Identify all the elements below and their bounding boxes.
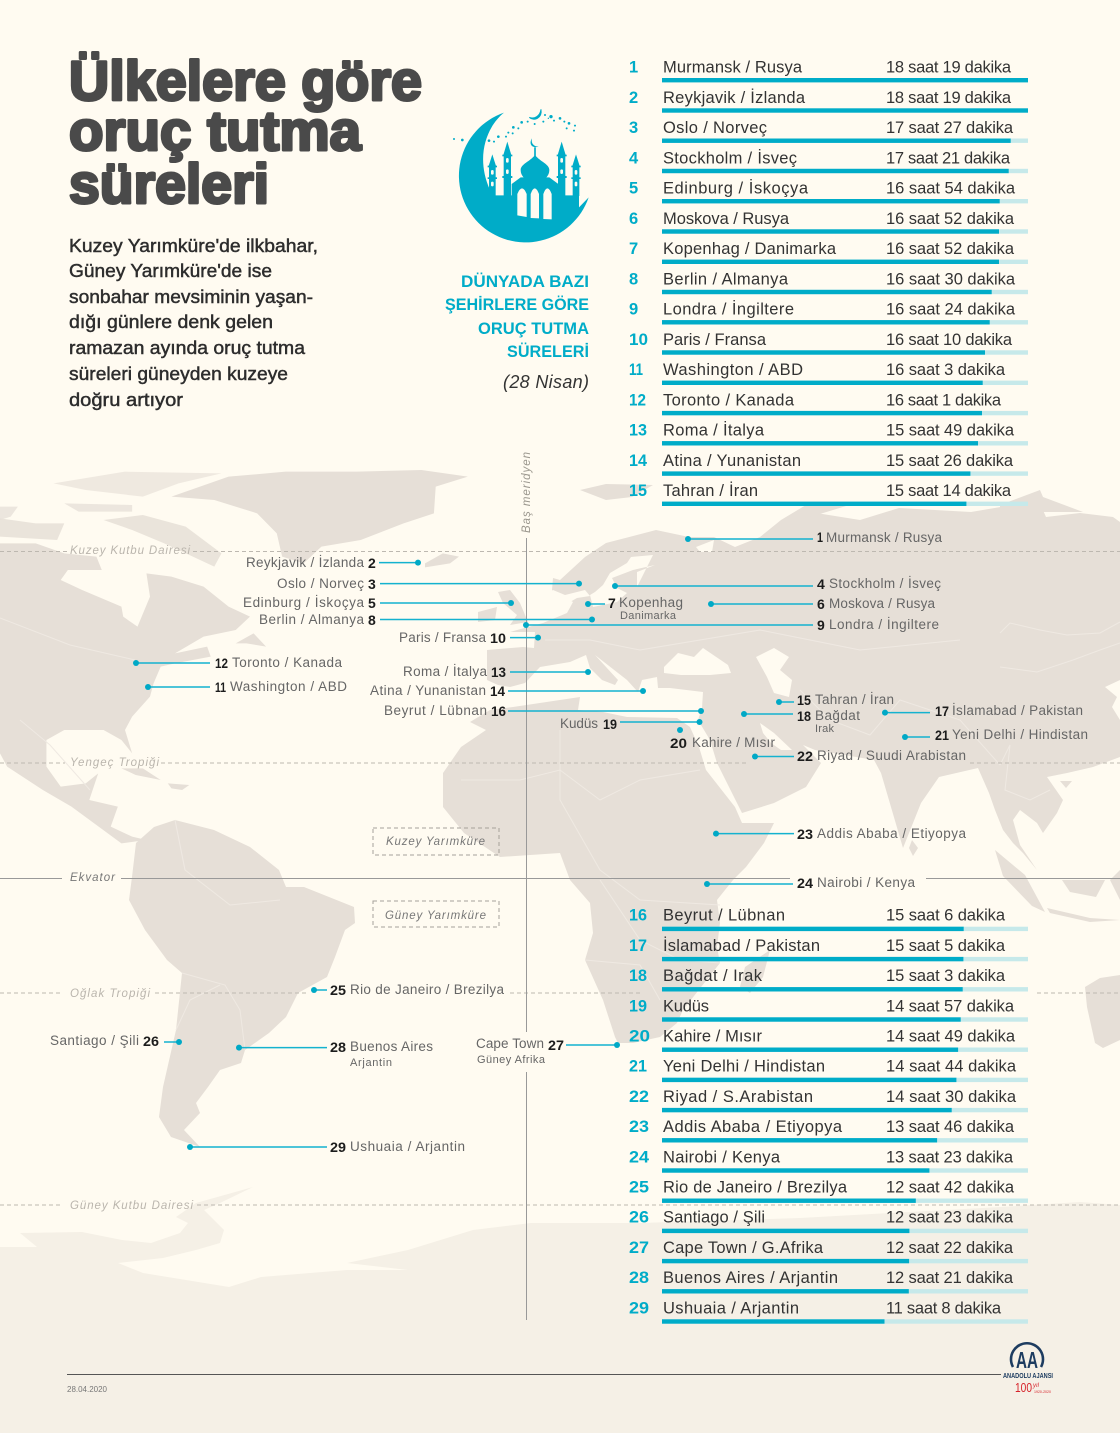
table row 6: 16 saat 52 dakika — [886, 210, 1015, 228]
intro paragraph: süreleri güneyden kuzeye — [69, 364, 288, 384]
table row 16: 15 saat 6 dakika — [886, 907, 1006, 925]
table row 15: 15 saat 14 dakika — [886, 482, 1012, 500]
table row 27: 27 — [629, 1239, 649, 1257]
table row 15: 15 — [629, 482, 647, 500]
table row 27: 12 saat 22 dakika — [886, 1239, 1014, 1257]
map label 8 — [259, 612, 595, 628]
map label 1: 1 — [817, 529, 823, 545]
table row 24 — [629, 1148, 1028, 1173]
seas cut out of Eurasia — [553, 540, 792, 750]
map label 26 — [50, 1033, 182, 1049]
map label 1 — [685, 529, 942, 545]
table row 26: 12 saat 23 dakika — [886, 1209, 1014, 1227]
table row 5: 5 — [629, 180, 638, 198]
table row 20: 14 saat 49 dakika — [886, 1028, 1016, 1046]
logo: Anadolu Ajansı: 100 — [1015, 1380, 1032, 1395]
table row 11 — [629, 361, 1028, 385]
map label 21: Yeni Delhi / Hindistan — [952, 727, 1088, 742]
South America — [129, 820, 355, 1147]
latitude labels: Güney Kutbu Dairesi — [70, 1200, 193, 1212]
map label 18: 18 — [797, 708, 811, 724]
latitude labels: Kuzey Kutbu Dairesi — [70, 545, 190, 557]
intro paragraph: ramazan ayında oruç tutma — [69, 338, 306, 358]
table row 8: 8 — [629, 270, 638, 288]
table row 9: 9 — [629, 301, 638, 319]
table row 9: Londra / İngiltere — [663, 300, 794, 319]
map label 17: İslamabad / Pakistan — [952, 703, 1083, 718]
map label 17: 17 — [935, 703, 949, 719]
title — [69, 49, 422, 215]
map label 6: Moskova / Rusya — [829, 596, 935, 611]
table row 10: 10 — [629, 331, 648, 349]
table row 14 — [629, 452, 1028, 476]
table row 9 — [629, 300, 1028, 324]
map label 23 — [713, 826, 966, 842]
latitude labels: Yengeç Tropiği — [70, 757, 159, 769]
table row 3: 17 saat 27 dakika — [886, 119, 1014, 137]
map label 14: 14 — [490, 683, 505, 699]
table row 3: 3 — [629, 119, 638, 137]
map label 27: 27 — [548, 1037, 564, 1053]
map label 24 — [704, 875, 915, 891]
table row 16 — [629, 907, 1028, 931]
section heading: SÜRELERİ — [507, 342, 589, 361]
section heading: DÜNYADA BAZI — [461, 272, 589, 291]
table row 21: 21 — [629, 1058, 647, 1076]
table row 16: Beyrut / Lübnan — [663, 907, 785, 925]
table row 26: 26 — [629, 1209, 649, 1227]
map label 10 — [399, 630, 541, 646]
table row 25: 25 — [629, 1178, 649, 1196]
table row 21 — [629, 1058, 1028, 1082]
table row 26 — [629, 1209, 1028, 1233]
table row 8: 16 saat 30 dakika — [886, 270, 1016, 288]
table row 27 — [629, 1239, 1028, 1263]
table row 18 — [629, 967, 1028, 992]
map label 22 — [752, 748, 966, 764]
map label 2: 2 — [368, 555, 376, 571]
table row 7: 7 — [629, 240, 638, 258]
map label 26: 26 — [143, 1033, 159, 1049]
map label 24: Nairobi / Kenya — [817, 875, 915, 890]
table row 7 — [629, 240, 1028, 264]
title: süreleri — [69, 152, 269, 215]
map label 13: 13 — [491, 664, 506, 680]
heading date: (28 Nisan) — [503, 372, 589, 392]
table row 13: Roma / İtalya — [663, 421, 765, 440]
table row 23: Addis Ababa / Etiyopya — [663, 1118, 843, 1136]
icon: crescent and mosque — [453, 109, 589, 242]
table row 13: 15 saat 49 dakika — [886, 422, 1015, 440]
map label 16: 16 — [491, 703, 506, 719]
table row 25 — [629, 1178, 1028, 1203]
table row 6 — [629, 210, 1028, 234]
table row 28: 12 saat 21 dakika — [886, 1269, 1014, 1287]
section heading — [445, 272, 589, 361]
logo: Anadolu Ajansı — [1003, 1343, 1053, 1395]
map label 18 — [741, 708, 860, 735]
map label 18: Irak — [815, 723, 834, 735]
table row 24: 13 saat 23 dakika — [886, 1148, 1014, 1166]
map label 20 — [670, 727, 776, 751]
table row 2: 2 — [629, 89, 638, 107]
intro paragraph — [69, 236, 318, 410]
latitude labels: Baş meridyen — [521, 452, 533, 533]
map label 29 — [187, 1139, 465, 1155]
table row 5: 16 saat 54 dakika — [886, 180, 1016, 198]
map label 22: Riyad / Suudi Arabistan — [817, 748, 966, 763]
table row 22 — [629, 1088, 1028, 1112]
table row 6: Moskova / Rusya — [663, 210, 790, 228]
table row 1: Murmansk / Rusya — [663, 59, 803, 77]
map label 23: 23 — [797, 826, 813, 842]
table row 12: Toronto / Kanada — [663, 391, 795, 409]
table row 19 — [629, 997, 1028, 1022]
map label 20: 20 — [670, 735, 687, 751]
table row 29 — [629, 1299, 1028, 1324]
table row 17 — [629, 936, 1028, 961]
table row 13 — [629, 421, 1028, 446]
table row 19: 19 — [629, 997, 647, 1015]
map label 13 — [403, 664, 591, 680]
table row 17: 17 — [629, 937, 647, 955]
Antarctica — [0, 1187, 1120, 1433]
table row 5 — [629, 179, 1028, 203]
table row 21: 14 saat 44 dakika — [886, 1058, 1017, 1076]
map label 4: 4 — [817, 576, 825, 592]
table row 16: 16 — [629, 907, 647, 925]
islands of Europe and Asia — [478, 484, 1120, 1048]
table row 23 — [629, 1118, 1028, 1142]
table row 1: 18 saat 19 dakika — [886, 59, 1012, 77]
table row 23: 23 — [629, 1118, 649, 1136]
map label 1: Murmansk / Rusya — [826, 530, 942, 545]
table row 13: 13 — [629, 422, 647, 440]
map label 24: 24 — [797, 875, 813, 891]
table row 1: 1 — [629, 59, 638, 77]
table row 3: Oslo / Norveç — [663, 119, 767, 137]
map label 5: 5 — [368, 595, 376, 611]
table row 24: Nairobi / Kenya — [663, 1148, 781, 1166]
table row 28: 28 — [629, 1269, 649, 1287]
map label 29: 29 — [330, 1139, 346, 1155]
map label 27: Güney Afrika — [477, 1054, 546, 1066]
table row 20: Kahire / Mısır — [663, 1028, 762, 1046]
map label 7: Kopenhag — [619, 595, 683, 610]
footer rule — [67, 1374, 1001, 1376]
logo: Anadolu Ajansı: ANADOLU AJANSI — [1003, 1371, 1053, 1380]
map label 9: 9 — [817, 617, 825, 633]
Eurasia — [487, 503, 1120, 870]
map label 8: Berlin / Almanya — [259, 612, 364, 627]
map label 12 — [133, 655, 342, 671]
map label 3: Oslo / Norveç — [277, 576, 364, 591]
table row 7: 16 saat 52 dakika — [886, 240, 1015, 258]
Madagascar — [740, 950, 770, 993]
map label 23: Addis Ababa / Etiyopya — [817, 826, 966, 841]
map label 16 — [384, 703, 704, 719]
table row 20 — [629, 1028, 1028, 1052]
table row 5: Edinburg / İskoçya — [663, 179, 809, 198]
table row 27: Cape Town / G.Afrika — [663, 1239, 824, 1257]
map label 4: Stockholm / İsveç — [829, 576, 941, 591]
map label 19: Kudüs — [560, 716, 598, 731]
intro paragraph: Kuzey Yarımküre'de ilkbahar, — [69, 236, 318, 256]
map label 3 — [277, 576, 582, 592]
latitude labels — [70, 452, 533, 1212]
map label 15 — [776, 692, 894, 708]
world map — [0, 470, 1120, 1433]
map label 7: 7 — [608, 595, 616, 611]
table row 14: Atina / Yunanistan — [663, 452, 801, 470]
table row 2: Reykjavik / İzlanda — [663, 88, 806, 107]
table row 11: 11 — [629, 361, 643, 379]
table row 10 — [629, 331, 1028, 355]
map label 17 — [882, 703, 1083, 719]
table row 28: Buenos Aires / Arjantin — [663, 1269, 838, 1287]
table row 18: Bağdat / Irak — [663, 967, 763, 985]
table row 14: 15 saat 26 dakika — [886, 452, 1014, 470]
map label 11: Washington / ABD — [230, 679, 347, 694]
intro paragraph: dığı günlere denk gelen — [69, 312, 273, 332]
map label 25: 25 — [330, 982, 346, 998]
map label 19 — [560, 716, 702, 732]
intro paragraph: doğru artıyor — [69, 390, 183, 410]
box: northern hemisphere: Kuzey Yarımküre — [386, 836, 485, 848]
table row 7: Kopenhag / Danimarka — [663, 240, 837, 258]
table row 6: 6 — [629, 210, 638, 228]
table row 11: Washington / ABD — [663, 361, 803, 379]
footer date: 28.04.2020 — [67, 1385, 108, 1394]
table row 21: Yeni Delhi / Hindistan — [663, 1058, 825, 1076]
map label 9: Londra / İngiltere — [829, 617, 939, 632]
table row 8 — [629, 270, 1028, 294]
map label 4 — [612, 576, 941, 592]
table row 29: Ushuaia / Arjantin — [663, 1299, 799, 1317]
table row 4: 17 saat 21 dakika — [886, 149, 1011, 167]
latitude labels: Oğlak Tropiği — [70, 988, 150, 1000]
map label 10: 10 — [490, 630, 506, 646]
table row 4 — [629, 148, 1028, 173]
map label 7: Danimarka — [620, 610, 677, 622]
map label 9 — [523, 617, 939, 633]
table row 22: 14 saat 30 dakika — [886, 1088, 1017, 1106]
logo: Anadolu Ajansı: 1920-2020 — [1034, 1389, 1052, 1394]
table row 2: 18 saat 19 dakika — [886, 89, 1012, 107]
map label 5: Edinburg / İskoçya — [243, 595, 364, 610]
section heading: ŞEHİRLERE GÖRE — [445, 295, 589, 314]
table row 25: Rio de Janeiro / Brezilya — [663, 1178, 848, 1196]
map label 15: Tahran / İran — [815, 692, 894, 707]
map label 19: 19 — [603, 716, 617, 732]
table row 4: 4 — [629, 149, 639, 167]
map label 18: Bağdat — [815, 708, 860, 723]
table row 1 — [629, 59, 1028, 82]
box: southern hemisphere: Güney Yarımküre — [385, 910, 486, 922]
table row 12: 12 — [629, 391, 646, 409]
map label 8: 8 — [368, 612, 376, 628]
table row 29: 11 saat 8 dakika — [886, 1299, 1002, 1317]
latitude labels: Ekvator — [70, 872, 116, 884]
map label 21 — [902, 727, 1088, 743]
table row 22: Riyad / S.Arabistan — [663, 1088, 813, 1106]
table row 29: 29 — [629, 1299, 649, 1317]
intro paragraph: sonbahar mevsiminin yaşan- — [69, 287, 313, 307]
table row 28 — [629, 1269, 1028, 1294]
map label 12: 12 — [215, 655, 228, 671]
title: Ülkelere göre — [69, 49, 422, 112]
table row 2 — [629, 88, 1028, 113]
map label 28 — [236, 1039, 433, 1069]
map label 28: 28 — [330, 1039, 346, 1055]
map label 28: Buenos Aires — [350, 1039, 433, 1054]
map label 21: 21 — [935, 727, 949, 743]
map label 27 — [476, 1036, 620, 1066]
table row 12: 16 saat 1 dakika — [886, 391, 1002, 409]
table row 17: 15 saat 5 dakika — [886, 937, 1006, 955]
logo: Anadolu Ajansı: yıl — [1032, 1383, 1040, 1389]
table row 24: 24 — [629, 1148, 650, 1166]
map label 3: 3 — [368, 576, 376, 592]
map label 14 — [370, 683, 646, 699]
map label 27: Cape Town — [476, 1036, 544, 1051]
map label 26: Santiago / Şili — [50, 1033, 139, 1048]
table row 17: İslamabad / Pakistan — [663, 936, 820, 955]
map label 28: Arjantin — [350, 1057, 392, 1069]
map label 11: 11 — [215, 679, 226, 695]
Africa — [443, 697, 774, 1043]
map label 13: Roma / İtalya — [403, 664, 487, 679]
map label 15: 15 — [797, 692, 811, 708]
table row 26: Santiago / Şili — [663, 1209, 765, 1227]
map label 5 — [243, 595, 514, 611]
map label 14: Atina / Yunanistan — [370, 683, 486, 698]
table row 8: Berlin / Almanya — [663, 270, 789, 288]
section heading: ORUÇ TUTMA — [478, 319, 589, 338]
map label 25: Rio de Janeiro / Brezilya — [350, 982, 504, 997]
title: oruç tutma — [69, 99, 362, 162]
map label 16: Beyrut / Lübnan — [384, 703, 487, 718]
table row 19: 14 saat 57 dakika — [886, 997, 1015, 1015]
table row 22: 22 — [629, 1088, 649, 1106]
table row 14: 14 — [629, 452, 648, 470]
north polar lands: Greenland, Canadian Arctic, North America — [0, 470, 468, 843]
table row 23: 13 saat 46 dakika — [886, 1118, 1015, 1136]
latitude lines — [0, 538, 1120, 1320]
table row 9: 16 saat 24 dakika — [886, 301, 1016, 319]
table row 20: 20 — [629, 1028, 650, 1046]
table row 4: Stockholm / İsveç — [663, 148, 797, 167]
box: northern hemisphere — [373, 828, 499, 855]
table row 19: Kudüs — [663, 997, 709, 1015]
box: southern hemisphere — [373, 901, 499, 927]
country borders — [0, 618, 1120, 1050]
map label 6 — [708, 596, 935, 612]
map label 20: Kahire / Mısır — [692, 735, 776, 750]
table row 25: 12 saat 42 dakika — [886, 1178, 1015, 1196]
table row 10: Paris / Fransa — [663, 331, 767, 349]
table row 3 — [629, 119, 1028, 143]
map label 2 — [246, 555, 421, 571]
table row 18: 15 saat 3 dakika — [886, 967, 1006, 985]
map label 29: Ushuaia / Arjantin — [350, 1139, 465, 1154]
table row 10: 16 saat 10 dakika — [886, 331, 1013, 349]
table row 18: 18 — [629, 967, 647, 985]
map label 11 — [145, 679, 347, 695]
map label 2: Reykjavik / İzlanda — [246, 555, 364, 570]
table row 11: 16 saat 3 dakika — [886, 361, 1006, 379]
table row 15 — [629, 481, 1028, 506]
map label 6: 6 — [817, 596, 825, 612]
map label 12: Toronto / Kanada — [232, 655, 342, 670]
map label 22: 22 — [797, 748, 813, 764]
logo: Anadolu Ajansı: AA — [1016, 1347, 1038, 1373]
intro paragraph: Güney Yarımküre'de ise — [69, 261, 272, 281]
table row 15: Tahran / İran — [663, 481, 758, 500]
map label 7 — [585, 595, 683, 622]
map label 10: Paris / Fransa — [399, 630, 486, 645]
table row 12 — [629, 391, 1028, 415]
